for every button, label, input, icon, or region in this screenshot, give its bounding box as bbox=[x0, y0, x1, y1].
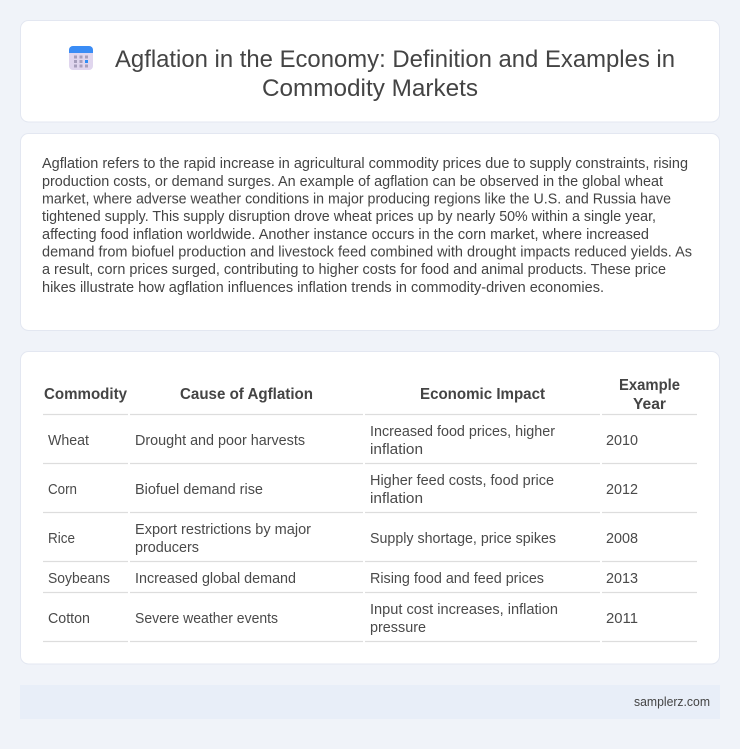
title: Commodity Markets bbox=[262, 75, 478, 102]
row: wheat: 2010 bbox=[606, 433, 638, 449]
icon: calendar bbox=[69, 46, 93, 70]
text block: definition paragraph bbox=[42, 156, 692, 296]
row: rice: Export restrictions by major bbox=[135, 522, 311, 538]
text block: definition paragraph: a result, corn prices surged, contributing to higher costs for food and animal products. These price bbox=[42, 262, 666, 278]
row: corn bbox=[48, 473, 638, 507]
text block: definition paragraph: hikes illustrate how agflation influences inflation trends in commodity-driven economies. bbox=[42, 280, 604, 296]
row: cotton: pressure bbox=[370, 620, 426, 636]
row: soybeans: 2013 bbox=[606, 571, 638, 587]
footer bar bbox=[20, 685, 720, 719]
row: soybeans: Increased global demand bbox=[135, 571, 296, 587]
row: soybeans bbox=[48, 571, 638, 587]
text block: definition paragraph: demand from biofuel production and livestock feed combined with drought impacts reduced yields. As bbox=[42, 244, 692, 260]
title bbox=[115, 46, 675, 102]
row: cotton: Input cost increases, inflation bbox=[370, 602, 558, 618]
panel: definition text bbox=[20, 134, 720, 330]
text block: definition paragraph: market, where adverse weather conditions in major producing regions like the U.S. and Russia have bbox=[42, 192, 671, 208]
row: wheat: Wheat bbox=[48, 433, 89, 449]
text block: definition paragraph: production costs, or demand surges. An example of agflation can be observed in the global wheat bbox=[42, 174, 663, 190]
row: wheat: Drought and poor harvests bbox=[135, 433, 305, 449]
title: Agflation in the Economy: Definition and Examples in bbox=[115, 46, 675, 73]
panel: title card bbox=[20, 20, 720, 122]
table header: Economic Impact bbox=[420, 386, 545, 403]
footer source text: samplerz.com bbox=[634, 695, 710, 709]
row: corn: Biofuel demand rise bbox=[135, 482, 263, 498]
row: corn: Corn bbox=[48, 482, 77, 498]
row: cotton bbox=[48, 602, 638, 636]
row: wheat: inflation bbox=[370, 442, 423, 458]
row: soybeans: Soybeans bbox=[48, 571, 110, 587]
row: cotton: 2011 bbox=[606, 611, 638, 627]
row: cotton: Cotton bbox=[48, 611, 90, 627]
row: soybeans: Rising food and feed prices bbox=[370, 571, 544, 587]
row: rice bbox=[48, 522, 638, 556]
table header: Example bbox=[619, 377, 680, 394]
row: corn: 2012 bbox=[606, 482, 638, 498]
row: rice: Supply shortage, price spikes bbox=[370, 531, 556, 547]
row: cotton: Severe weather events bbox=[135, 611, 278, 627]
row: wheat bbox=[48, 424, 638, 458]
panel: commodity table bbox=[20, 352, 720, 664]
text block: definition paragraph: Agflation refers to the rapid increase in agricultural commodity prices due to supply constraints, rising bbox=[42, 156, 688, 172]
table header: Cause of Agflation bbox=[180, 386, 313, 403]
row: rice: producers bbox=[135, 540, 199, 556]
row: rice: Rice bbox=[48, 531, 75, 547]
text block: definition paragraph: tightened supply. This supply disruption drove wheat prices up by nearly 50% within a single year, bbox=[42, 209, 656, 225]
row: corn: Higher feed costs, food price bbox=[370, 473, 554, 489]
table header bbox=[44, 377, 680, 413]
row: wheat: Increased food prices, higher bbox=[370, 424, 555, 440]
row: corn: inflation bbox=[370, 491, 423, 507]
table header: Year bbox=[633, 396, 666, 413]
row: rice: 2008 bbox=[606, 531, 638, 547]
text block: definition paragraph: affecting food inflation worldwide. Another instance occurs in the corn market, where increased bbox=[42, 227, 649, 243]
table header: Commodity bbox=[44, 386, 127, 403]
table rules bbox=[43, 414, 697, 642]
